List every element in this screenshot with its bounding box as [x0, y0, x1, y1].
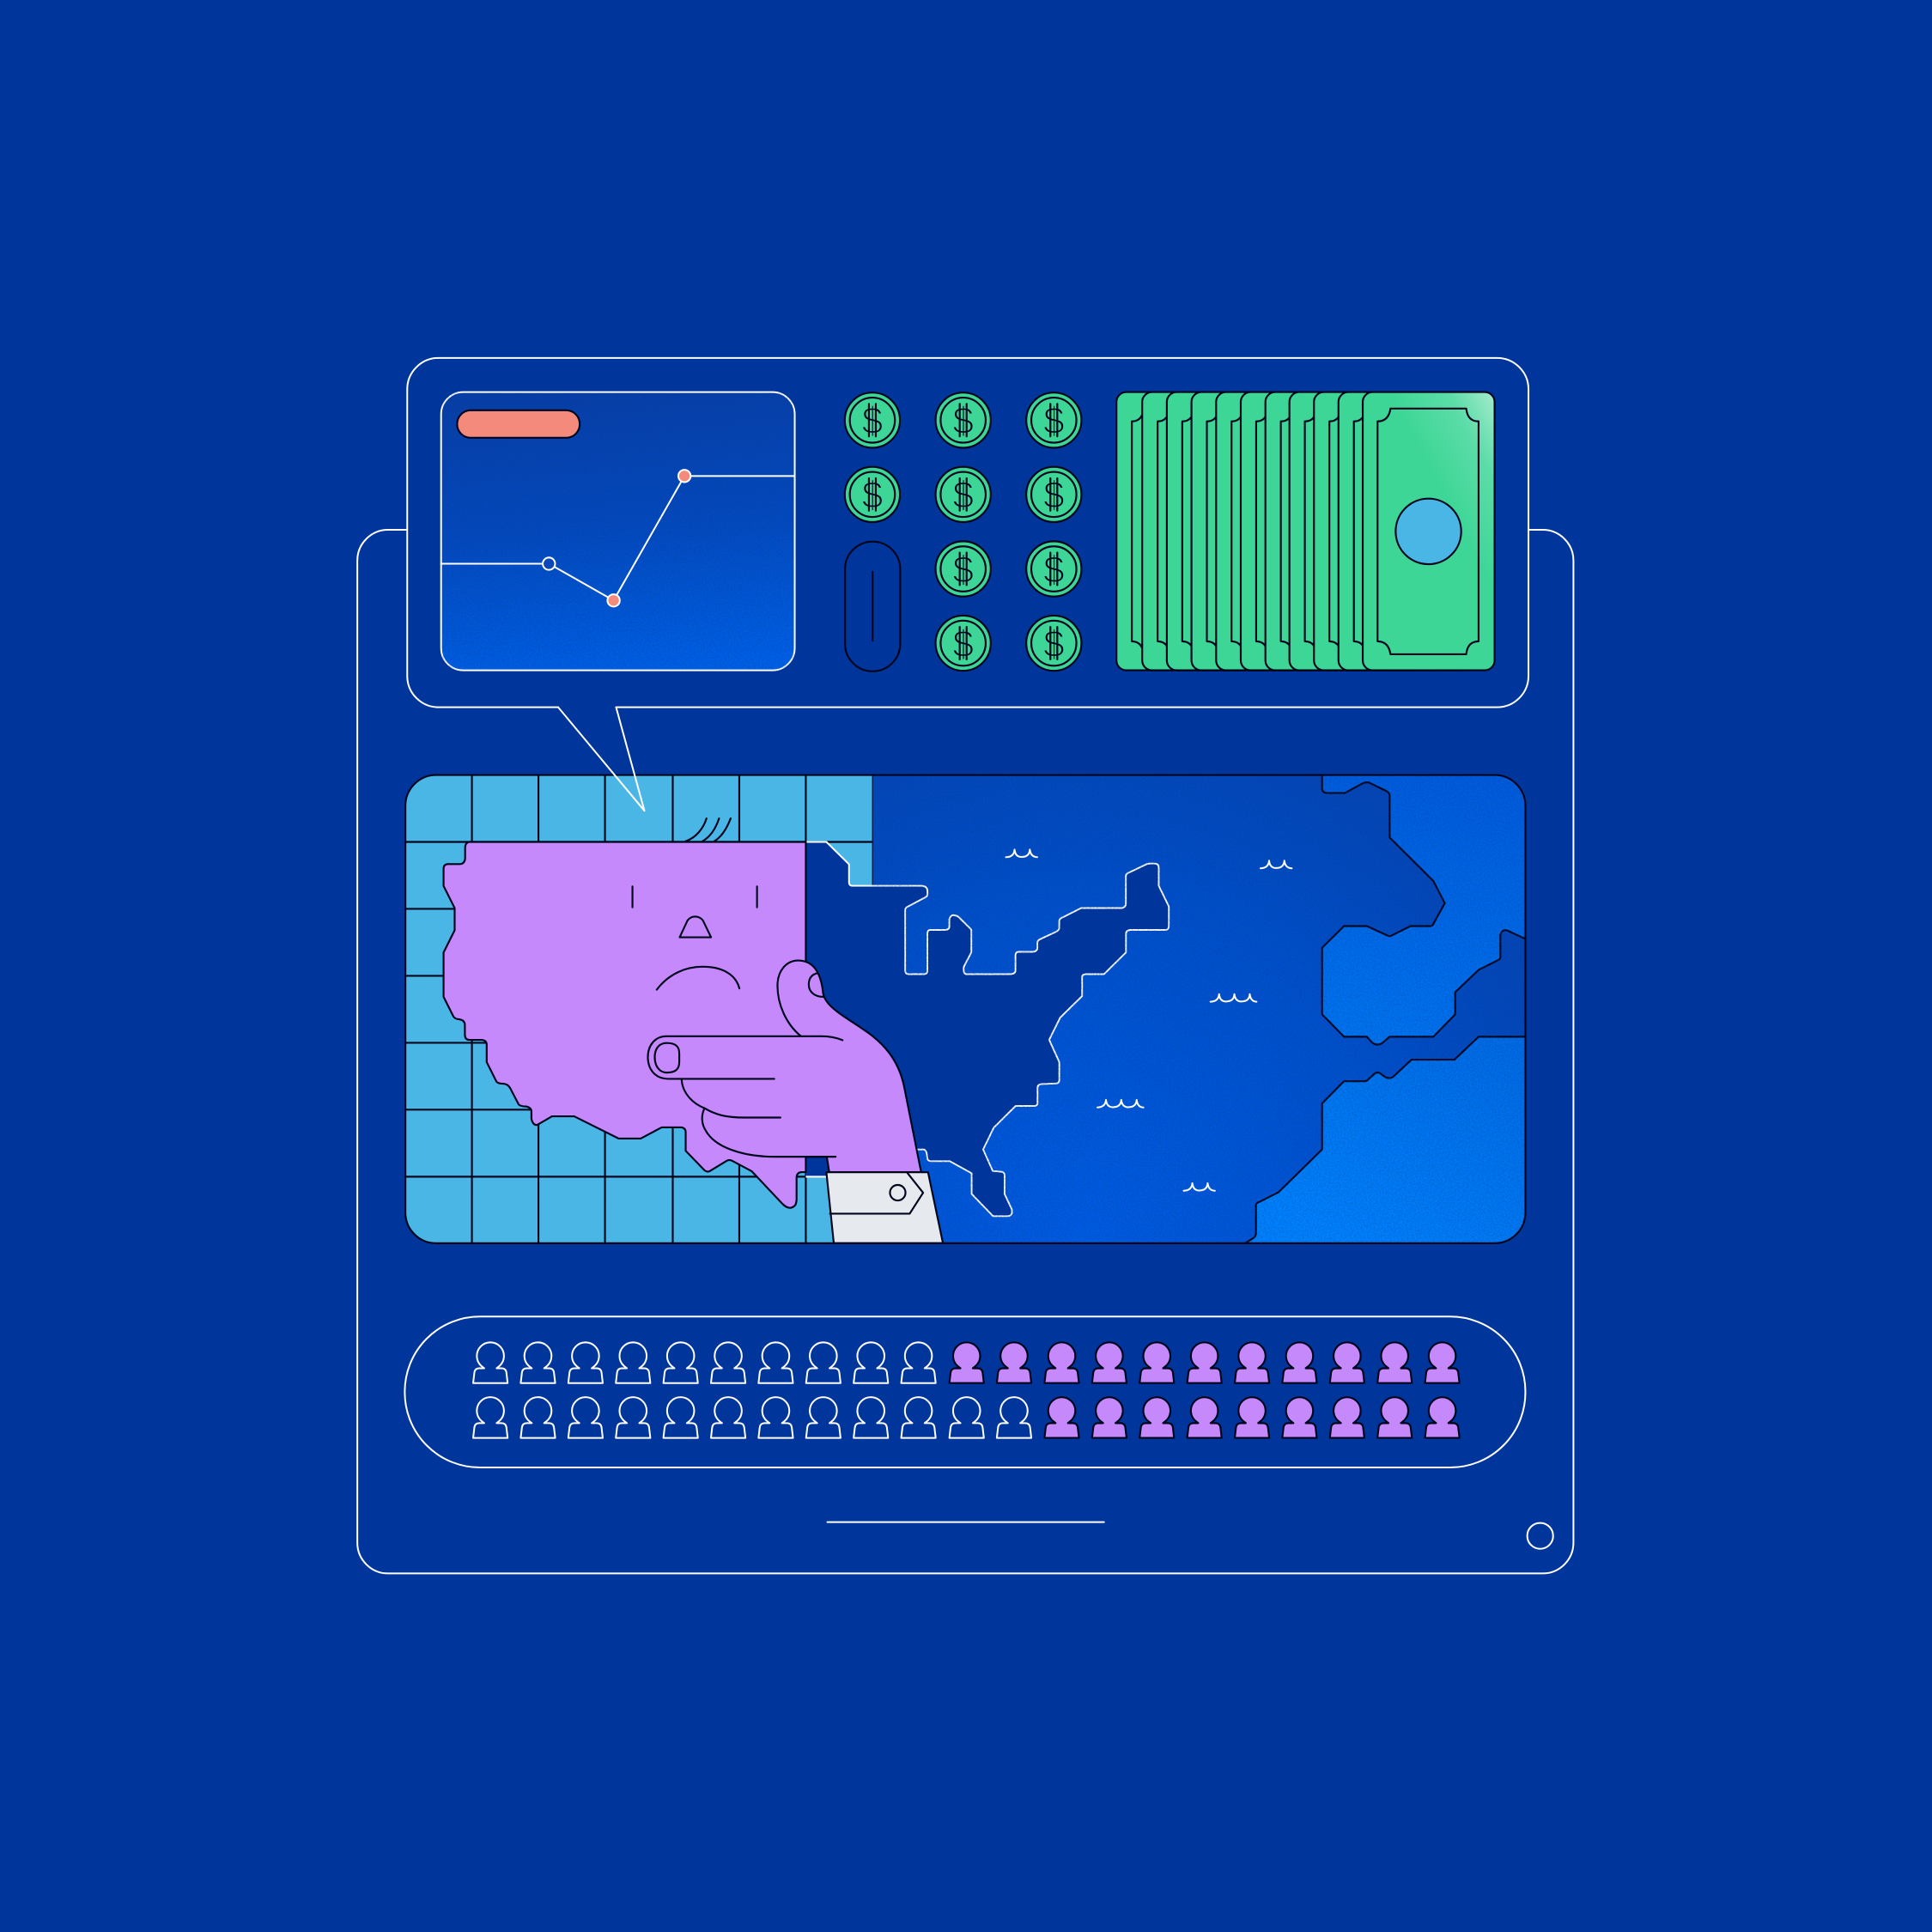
monitor stand line	[828, 1522, 1104, 1523]
region: southeast ocean	[1244, 1036, 1528, 1246]
chart background	[441, 392, 795, 671]
banknote	[1167, 392, 1298, 671]
wave 3	[1211, 994, 1256, 1002]
coin: $	[1043, 623, 1065, 665]
wave 1	[1005, 849, 1037, 857]
coin: $	[1043, 400, 1065, 442]
hairs	[685, 818, 731, 841]
coin: $	[1043, 475, 1065, 517]
coin	[936, 541, 991, 597]
character: face on west coast and hand	[444, 818, 943, 1243]
coin: $	[862, 475, 884, 517]
coral label pill	[457, 410, 580, 438]
coin: $	[952, 400, 974, 442]
banknote seal	[1395, 499, 1461, 564]
coin slot	[845, 542, 900, 671]
eyes	[633, 886, 757, 908]
panel: people pictogram	[404, 1316, 1525, 1467]
front banknote	[1363, 392, 1495, 671]
power button	[1528, 1523, 1553, 1549]
coin	[845, 467, 900, 522]
finger nail	[655, 1043, 679, 1072]
east coast land	[805, 842, 1169, 1216]
grid lines	[405, 775, 873, 1243]
coin	[845, 392, 900, 447]
coin	[936, 616, 991, 671]
banknote	[1192, 392, 1323, 671]
banknote	[1339, 392, 1470, 671]
data point 2	[607, 594, 620, 606]
banknote	[1216, 392, 1348, 671]
banknote	[1266, 392, 1397, 671]
coast under hand	[805, 1176, 827, 1177]
coin: $	[862, 400, 884, 442]
index finger	[647, 1036, 842, 1078]
waves	[1005, 849, 1291, 1191]
coin: $	[1043, 549, 1065, 591]
row 2 people	[473, 1397, 1460, 1438]
coin: $	[952, 623, 974, 665]
coin	[936, 467, 991, 522]
banknote	[1241, 392, 1373, 671]
cuff tab	[830, 1172, 923, 1213]
banknote	[1142, 392, 1274, 671]
third finger	[702, 1109, 835, 1157]
ocean grain	[873, 775, 1525, 1243]
wave 2	[1261, 860, 1291, 868]
nose	[680, 916, 711, 938]
second finger	[682, 1079, 781, 1117]
row 1 people	[473, 1342, 1460, 1383]
coin: $	[952, 475, 974, 517]
wave 4	[1097, 1100, 1144, 1108]
panel: stack of banknotes	[1116, 392, 1495, 671]
grid map land background	[405, 775, 873, 1243]
panel: coins	[845, 392, 1081, 671]
map border	[405, 775, 1525, 1243]
land cover over grain	[807, 843, 1168, 1215]
computer monitor frame	[357, 530, 1573, 1573]
speech bubble tail	[558, 708, 644, 811]
banknote	[1116, 392, 1249, 671]
pill container	[404, 1316, 1525, 1467]
banknote	[1314, 392, 1446, 671]
wave 5	[1184, 1183, 1215, 1191]
mouth	[657, 967, 739, 990]
coin	[1026, 541, 1081, 597]
ocean	[873, 775, 1526, 1243]
coin	[1026, 467, 1081, 522]
panel: map	[405, 773, 1528, 1246]
cuff button	[890, 1185, 906, 1200]
thumb nail	[809, 973, 823, 997]
coin: $	[952, 549, 974, 591]
coin	[1026, 392, 1081, 447]
region: northeast ocean	[1322, 773, 1528, 1044]
speech bubble	[407, 358, 1528, 708]
coin	[1026, 616, 1081, 671]
purple face and hand shape	[444, 842, 921, 1208]
panel: line chart	[441, 392, 795, 671]
shirt cuff	[826, 1172, 943, 1243]
data point 3	[678, 470, 690, 482]
data point 1	[543, 557, 555, 570]
coin	[936, 392, 991, 447]
banknote	[1290, 392, 1421, 671]
chart grain	[442, 393, 793, 669]
chart line	[441, 476, 795, 600]
water gap under hand	[806, 1157, 826, 1176]
thumb	[777, 961, 805, 1036]
